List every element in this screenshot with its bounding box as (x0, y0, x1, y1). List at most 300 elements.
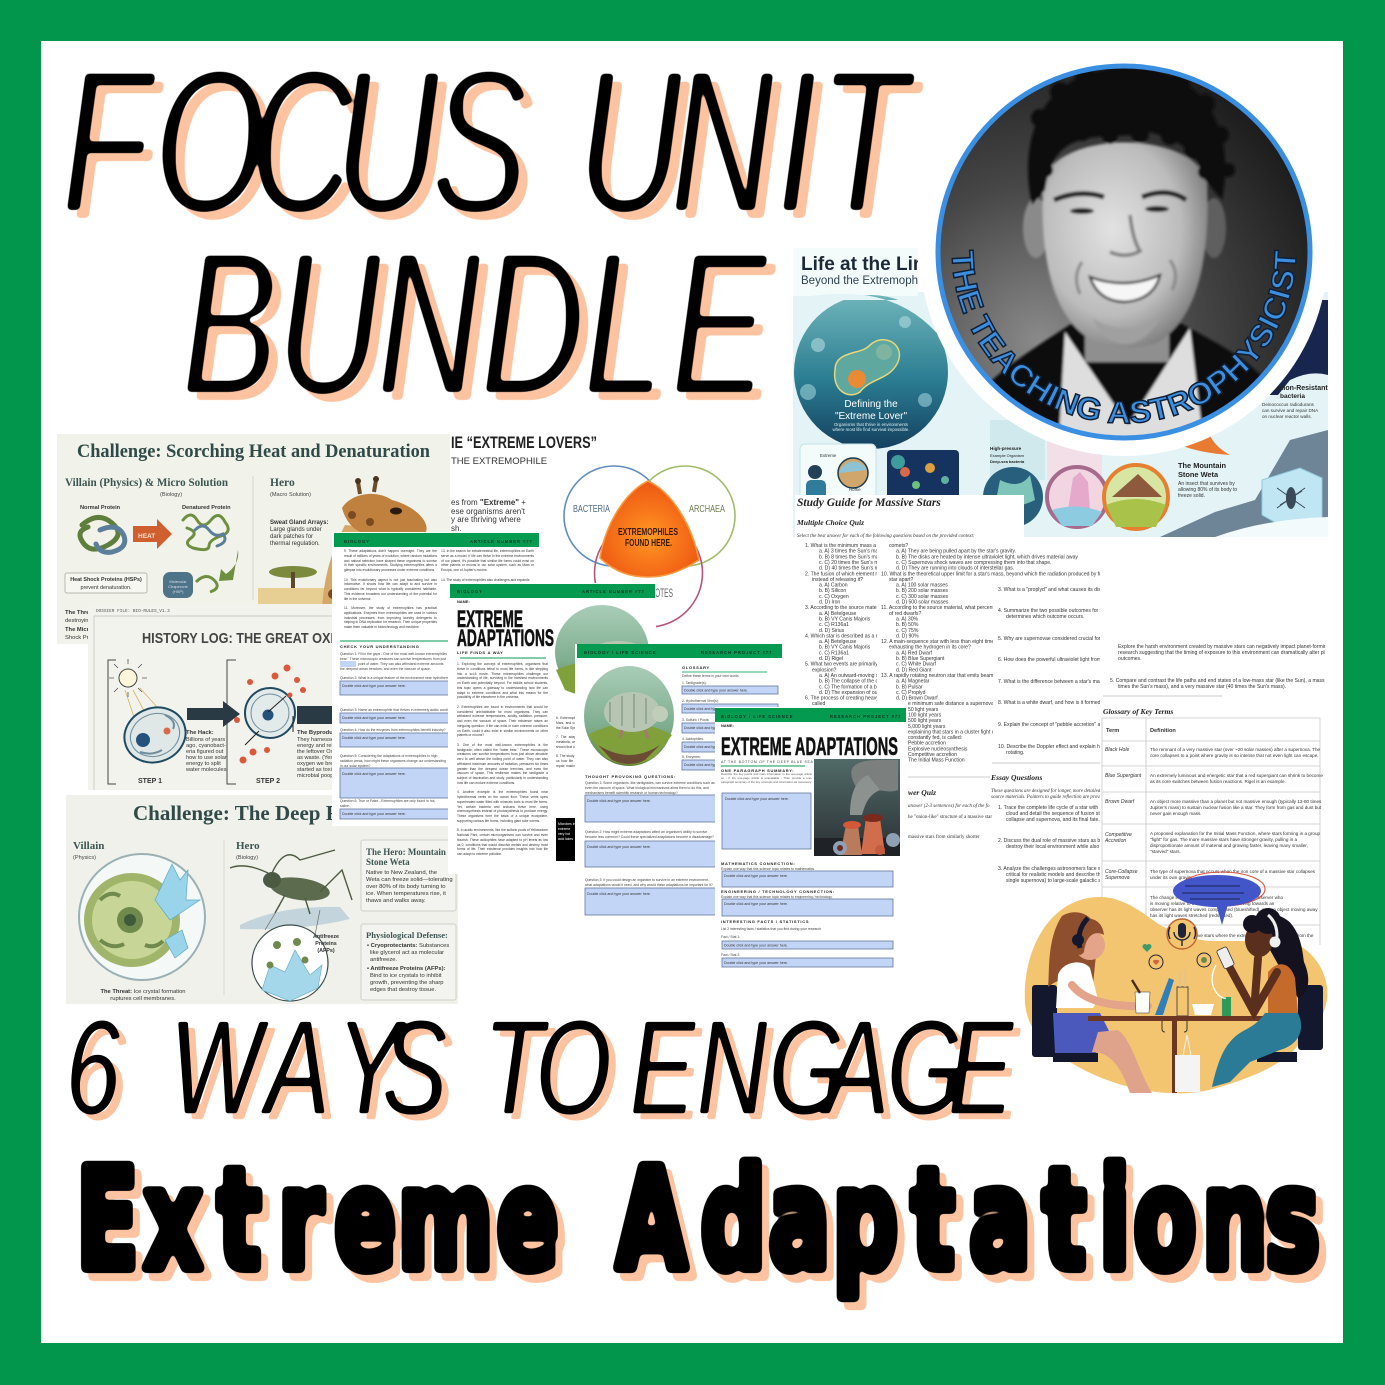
panel: Challenge The Deep Freeze slide (66, 795, 458, 1004)
panel: Study Guide for Massive Stars pages: rotating. (1006, 750, 1024, 756)
panel: Study Guide for Massive Stars pages: c. C) 300 solar masses (896, 594, 949, 600)
panel: Challenge The Deep Freeze slide: The Hero: Mountain (366, 847, 446, 857)
panel: Study Guide for Massive Stars pages: 5. What two events are primarily res (805, 662, 887, 668)
panel: Glossary of Key Terms page: times the Sun's mass), and a very massive star (40 times the Sun's mass). (1118, 684, 1286, 690)
title: BUNDLE: BUNDLE (191, 219, 778, 446)
panel: Challenge The Deep Freeze slide: Proteins (315, 941, 337, 947)
panel: Life at the Limit poster: where most life find survival impossible. (832, 427, 910, 432)
document: Research project glossary and questions page: 3. Sulfuric / Pools: (682, 718, 709, 722)
panel: Study Guide for Massive Stars pages: of red dwarfs? (889, 611, 921, 617)
panel: History Log slide: as waste. (Yes, (297, 755, 335, 761)
panel: Life at the Limit poster: freeze solid. (1178, 493, 1205, 499)
panel: Study Guide for Massive Stars pages: a. A) 30% (896, 616, 919, 622)
panel: Life at the Limit poster: Defining the (844, 399, 898, 410)
document: At the bottom of the deep blue sea page: BIOLOGY / LIFE SCIENCE (721, 714, 793, 719)
document: Research project glossary and questions page: Question 1: Some organisms, like tardigrades, can survive extreme conditions such as (585, 781, 715, 785)
panel: Challenge The Deep Freeze slide: antifreeze. (370, 957, 397, 963)
panel: Study Guide for Massive Stars pages: b. B) Blue Supergiant (896, 656, 945, 662)
panel: Challenge The Deep Freeze slide: growth, preventing the sharp (370, 980, 443, 986)
panel: Study Guide for Massive Stars pages: single supernova) to large-scale galactic structu (1006, 878, 1114, 884)
document: Biology article 77 questions page: in our solar system? (340, 764, 370, 768)
document: At the bottom of the deep blue sea page: MATHEMATICS CONNECTION: (721, 861, 795, 866)
document: Extreme Adaptations article page: Microbes in (558, 822, 575, 826)
panel: Study Guide for Massive Stars pages: 7. What is the difference between a star's mass and (998, 679, 1115, 685)
panel: Challenge The Deep Freeze slide: • Cryoprotectants: Substances (367, 943, 449, 949)
panel: History Log slide: STEP 2 (256, 778, 280, 785)
panel: Study Guide for Massive Stars pages: 3. According to the source material, (805, 605, 885, 611)
title: BUNDLE: BUNDLE (182, 211, 769, 438)
panel: Study Guide for Massive Stars pages: d. D) 90% (896, 633, 919, 639)
panel: Life at the Limit poster: Radiation-Resistant (1262, 385, 1328, 392)
panel: Extreme Lovers venn infographic: BACTERIA (573, 504, 610, 515)
document: At the bottom of the deep blue sea page: Fact / Stat 2: (721, 953, 740, 957)
panel: Study Guide for Massive Stars pages: d. D) Brown Dwarf (896, 696, 938, 702)
panel: Study Guide for Massive Stars pages: d. D) They are running into clouds of interstellar gas. (896, 566, 1014, 572)
panel: Glossary of Key Terms page: as its core switches between fusion reactions. Rigel is an example. (1150, 779, 1286, 784)
document: At the bottom of the deep blue sea page: Explain one way that this science topic relates to mathematics. (721, 867, 815, 871)
panel: Study Guide for Massive Stars pages: c. C) The formation of a blac (819, 684, 884, 690)
panel: Challenge Scorching Heat and Denaturation slide: thermal regulation. (270, 541, 320, 547)
panel: Study Guide for Massive Stars pages: a. A) Carbon (819, 583, 848, 589)
panel: Life at the Limit poster: bacteria (1280, 393, 1305, 400)
panel: Glossary of Key Terms page: Definition (1150, 728, 1176, 734)
panel: Challenge Scorching Heat and Denaturation slide: Hero (270, 477, 295, 489)
illustration: two people listening to a podcast (1025, 872, 1327, 1093)
panel: Study Guide for Massive Stars pages: massive stars from similarly shorter (908, 835, 980, 840)
panel: Challenge Scorching Heat and Denaturation slide: dark patches for (270, 534, 313, 540)
panel: Study Guide for Massive Stars pages: destroy their local environment while also enabli (1006, 844, 1114, 850)
panel: Study Guide for Massive Stars pages: c. C) Oxygen (819, 594, 849, 600)
panel: Study Guide for Massive Stars pages: star apart? (889, 577, 914, 583)
panel: Study Guide for Massive Stars pages: 4. Which star is described as a red (805, 633, 883, 639)
panel: Glossary of Key Terms page (1102, 644, 1385, 945)
document: Research project glossary and questions page: become less common? Could these specialized adaptations become a disadvantage? (585, 835, 714, 839)
panel: Glossary of Key Terms page: outcomes. (1118, 656, 1142, 662)
panel: Study Guide for Massive Stars pages: instead of releasing it? (812, 577, 863, 583)
document: Research project glossary and questions page: 1. Tardigrade(s): (682, 681, 707, 685)
panel: Study Guide for Massive Stars pages: These questions are designed for longer, more detailed (991, 789, 1101, 794)
document: Research project glossary and questions page: BIOLOGY / LIFE SCIENCE (584, 650, 656, 655)
panel: Life at the Limit poster: Life at the Limit (801, 254, 942, 275)
panel: Glossary of Key Terms page: Accretion (1104, 838, 1126, 844)
panel: Study Guide for Massive Stars pages: a. A) Red Dwarf (896, 650, 933, 656)
panel: Life at the Limit poster: An insect that survives by (1178, 481, 1235, 487)
panel: Extreme Lovers venn infographic: sh. (451, 524, 462, 533)
heading: 6 WAYS TO ENGAGE: 6 WAYS TO ENGAGE (66, 992, 1014, 1143)
panel: Challenge The Deep Freeze slide: edges that destroy tissue. (370, 987, 436, 993)
panel: Study Guide for Massive Stars pages: 5. Why are supernovae considered crucial for the existence of planets like Earth and life as we know it? (998, 636, 1231, 642)
document: Extreme Adaptations article page: 7. The adaptations seen in these organisms are physical, metabolic, and evolutionary. These studies high over time have shown that organisms. (556, 735, 649, 748)
panel: Study Guide for Massive Stars pages: d. D) Rigel (819, 656, 843, 662)
heading: 6 WAYS TO ENGAGE: 6 WAYS TO ENGAGE (73, 998, 1021, 1149)
panel: Challenge The Deep Freeze slide: over 80% of its body turning to (366, 884, 446, 890)
document: At the bottom of the deep blue sea page: List 2 interesting facts / statistics that you find during your research (721, 927, 821, 931)
panel: Life at the Limit poster: allowing 80% of its body to (1178, 487, 1237, 493)
panel: Challenge Scorching Heat and Denaturation slide: Denatured Protein (182, 505, 231, 511)
document: Biology article 77 questions page: point of water. They can also withstand extreme amounts (358, 662, 444, 666)
icon: podcast microphone (1167, 919, 1197, 949)
panel: Extreme Lovers venn infographic (451, 433, 736, 628)
panel: History Log slide: oxygen we bre (297, 761, 333, 767)
document: Biology article 77 questions page: Question 5: Considering the adaptations of extremophiles to high (340, 754, 438, 758)
panel: History Log slide: Billions of years (186, 737, 225, 743)
panel: Glossary of Key Terms page: Supernova (1105, 875, 1130, 881)
panel: Study Guide for Massive Stars pages: cloud and detail the sequence of fusion stages it (1006, 811, 1115, 817)
document: At the bottom of the deep blue sea page: RESEARCH PROJECT #77 (830, 714, 901, 719)
document: At the bottom of the deep blue sea page: ENGINEERING / TECHNOLOGY CONNECTION: (721, 889, 835, 894)
document: Extreme Adaptations article page: 6. Extremophiles are also important in astrobiology, similar to Mars, and could be hosts for life, leading scientists to search the Solar System. (556, 716, 649, 730)
panel: Study Guide for Massive Stars pages: comets? (889, 543, 908, 549)
document: Extreme Adaptations article page: LIFE FINDS A WAY (457, 650, 504, 655)
panel: Challenge The Deep Freeze slide: Weta can freeze solid—tolerating (366, 877, 453, 883)
document: Biology article 77 questions page: Question 1: Fill in the gaps - One of the most well-known extremophiles is the (340, 652, 456, 656)
panel: Life at the Limit poster: High-pressure (990, 446, 1022, 451)
document: Biology article 77 questions page: saline. (340, 804, 350, 808)
panel: Study Guide for Massive Stars pages: determines which outcome occurs. (1006, 614, 1084, 620)
document: Extreme Adaptations article page: 8. The study of extreme life reveals special enzymes that show us how life persists under pressure and reveal unique DNA repair, making these studies crucial. (556, 754, 649, 768)
panel: Glossary of Key Terms page: An object more massive than a planet but not massive enough (typically 13-80 times (1150, 799, 1322, 804)
document: Extreme Adaptations article page: NAME: (457, 599, 470, 604)
panel: Glossary of Key Terms page: disproportionate amount of material and growing faster, leaving many smaller, (1150, 843, 1308, 848)
panel: History Log slide: The Byproduct (297, 730, 338, 736)
panel: Study Guide for Massive Stars pages: collapse and supernova, and its final fate. (1006, 817, 1100, 823)
panel: Challenge Scorching Heat and Denaturation slide: (Macro Solution) (270, 492, 311, 498)
panel: Study Guide for Massive Stars pages: b. B) Pulsar (896, 684, 923, 690)
document: Extreme Adaptations article page (448, 583, 656, 874)
panel: Extreme Lovers venn infographic: IE “EXTREME LOVERS” (451, 433, 597, 452)
document: At the bottom of the deep blue sea page: ONE PARAGRAPH SUMMARY: (721, 768, 794, 773)
panel: Challenge The Deep Freeze slide: Challenge: The Deep Freeze (133, 801, 385, 825)
panel: Glossary of Key Terms page: core collapses to a point where gravity is so intense that not even light can escape. (1150, 753, 1319, 758)
panel: Life at the Limit poster: Stone Weta (1178, 470, 1219, 479)
panel: Glossary of Key Terms page: A proposed explanation for the Initial Mass Function, where stars forming in a group (1150, 831, 1321, 836)
document: Research project glossary and questions page: Question 3: If you could design an organism to survive in an extreme environment, (585, 878, 709, 882)
document: At the bottom of the deep blue sea page: Double click and type your answer here. (724, 961, 788, 965)
panel: Extreme Lovers venn infographic: THE EXTREMOPHILE (451, 456, 547, 467)
panel: Glossary of Key Terms page: Glossary of Key Terms (1103, 707, 1173, 716)
panel: Study Guide for Massive Stars pages: source materials. Pointers to guide reflection are provid (991, 795, 1104, 800)
panel: Study Guide for Massive Stars pages: b. B) 50% (896, 622, 919, 628)
panel: Challenge Scorching Heat and Denaturation slide (57, 434, 450, 644)
panel: Challenge Scorching Heat and Denaturation slide: (Biology) (160, 492, 182, 498)
panel: Extreme Lovers venn infographic: ARCHAEA (689, 504, 725, 515)
panel: Study Guide for Massive Stars pages: 1. Trace the complete life cycle of a star with 25 tim (998, 805, 1114, 811)
panel: Study Guide for Massive Stars pages: he "onion-like" structure of a massive star (908, 815, 992, 820)
panel: Study Guide for Massive Stars pages: b. B) The disks are heated by intense ultraviolet light, which drives material away (896, 554, 1078, 560)
panel: Study Guide for Massive Stars pages: explaining that stars in a cluster fight ove (908, 729, 1000, 735)
panel: Study Guide for Massive Stars pages: c. C) 20 times the Sun's mass (819, 560, 887, 566)
panel: Study Guide for Massive Stars pages (795, 495, 1246, 884)
document: Research project glossary and questions page: what adaptations would it need, and why would these adaptations be important for it? (585, 883, 713, 887)
document: Research project glossary and questions page: GLOSSARY (682, 665, 710, 670)
panel: Study Guide for Massive Stars pages: Competitive accretion (908, 752, 957, 758)
panel: Study Guide for Massive Stars pages: 2. Discuss the dual role of massive stars as both d (998, 838, 1112, 844)
panel: Study Guide for Massive Stars pages: 6. How does the powerful ultraviolet light from massive (998, 657, 1121, 663)
document: Biology article 77 questions page: Question 3: Name an extremophile that thrives in extremely acidic conditions. (340, 708, 456, 712)
panel: Challenge The Deep Freeze slide: Hero (236, 840, 260, 852)
document: Extreme Adaptations article page: 2. Extremophiles are found in environments that would be considered uninhabitable for most organisms. They can withstand extreme temperatures, acidity, radiation, pressure, and even the vacuum of space. Their existence raises an intriguing question: if life can exist in such extreme conditions on Earth, could it also exist in similar environments on other planets or moons? (457, 705, 548, 737)
document: Research project glossary and questions page: Define these terms in your own words (682, 674, 739, 678)
document: Extreme Adaptations article page: ADAPTATIONS (457, 625, 554, 652)
document: Research project glossary and questions page: THOUGHT PROVOKING QUESTIONS: (585, 774, 676, 779)
panel: Challenge Scorching Heat and Denaturation slide: destroying (65, 618, 92, 624)
panel: Study Guide for Massive Stars pages: a. A) 100 solar masses (896, 583, 948, 589)
document: Extreme Adaptations article page: 3. One of the most well-known extremophiles is the tardigrade, often called the "water bear." These microscopic creatures can survive temperatures from just above absolute zero to well above the boiling point of water. They can also withstand maximum amounts of radiation, pressures six times greater than the deepest ocean trenches, and even the vacuum of space. This resilience makes the tardigrade a subject of fascination and study, particularly in understanding how life can endure extreme conditions. (457, 743, 548, 785)
panel: Study Guide for Massive Stars pages: a. A) 3 times the Sun's mass (819, 549, 884, 555)
document: Extreme Adaptations article page: EXTREME (457, 606, 523, 633)
panel: Extreme Lovers venn infographic: y are thriving where (451, 515, 521, 524)
panel: Life at the Limit poster: Extreme (820, 453, 837, 458)
panel: Study Guide for Massive Stars pages: Select the best answer for each of the following questions based on the provided context: (797, 534, 975, 539)
panel: History Log slide: energy to split (186, 761, 221, 767)
panel: Challenge The Deep Freeze slide: The Threat: Ice crystal formation (100, 989, 186, 995)
document: Biology article 77 questions page: 9. These adaptations didn't happen overnight. They are the result of millions of years of evolution, where random mutations and natural selection have shaped these organisms to survive in their specific environments. Studying extremophiles offers a glimpse into evolutionary processes under extreme conditions. (344, 549, 437, 572)
panel: Study Guide for Massive Stars pages: Study Guide for Massive Stars (797, 497, 941, 509)
panel: Glossary of Key Terms page: Core-Collapse (1105, 869, 1138, 875)
panel: Glossary of Key Terms page: Jupiter's mass) to sustain nuclear fusion like a star. They form from gas and dust but (1150, 805, 1322, 810)
panel: Study Guide for Massive Stars pages: b. B) The collapse of the cor (819, 679, 883, 685)
document: Biology article 77 questions page: Question 2: What is a unique feature of the environment near hydrothermal vents? (340, 676, 464, 680)
panel: Challenge The Deep Freeze slide: Stone Weta (366, 857, 410, 867)
document: Biology article 77 questions page: radiation areas, how might these organisms change our understanding (340, 759, 446, 763)
panel: Study Guide for Massive Stars pages: c. C) R136a1 (819, 650, 849, 656)
panel: Challenge Scorching Heat and Denaturation slide: Molecular (169, 579, 187, 584)
panel: Challenge The Deep Freeze slide: (Physics) (73, 855, 96, 861)
document: Extreme Adaptations article page: acid lakes (558, 837, 573, 841)
document: Biology article 77 questions page: ARTICLE NUMBER #77 (470, 539, 533, 544)
icon: speech bubble (1173, 872, 1265, 925)
panel: Study Guide for Massive Stars pages: 2. The fusion of which element mark (805, 571, 887, 577)
document: Research project glossary and questions page: Double click and type your answer here. (684, 763, 748, 767)
panel: Study Guide for Massive Stars pages: Multiple Choice Quiz (796, 518, 864, 527)
panel: Glossary of Key Terms page: never gain enough mass. (1150, 811, 1202, 816)
panel: Glossary of Key Terms page: An extremely luminous and energetic star that a red supergiant can shrink to become (1150, 773, 1323, 778)
heading: Extreme Adaptations: Extreme Adaptations (83, 1146, 1327, 1309)
panel: Study Guide for Massive Stars pages: d. D) 500 solar masses (896, 600, 949, 606)
panel: Glossary of Key Terms page: The type of supernova that occurs when the iron core of a massive star collapses (1150, 869, 1316, 874)
title: FOCUS UNIT: FOCUS UNIT (71, 37, 924, 264)
panel: Study Guide for Massive Stars pages: 3. What is a "proplyd" and what causes its distinctive shape? (998, 587, 1135, 593)
panel: Life at the Limit poster: can survive and repair DNA (1262, 408, 1319, 413)
panel: Life at the Limit poster: Deep-sea bacteria (990, 459, 1025, 464)
panel: Study Guide for Massive Stars pages: d. D) Red Giant (896, 667, 932, 673)
panel: History Log slide: started as toxic (297, 767, 335, 773)
photo: The Teaching Astrophysicist badge: THE TEACHING ASTROPHYSICIST (951, 249, 1296, 424)
panel: Study Guide for Massive Stars pages: b. B) VY Canis Majoris (819, 616, 871, 622)
document: Extreme Adaptations article page: extreme (558, 827, 570, 831)
panel: Study Guide for Massive Stars pages: 10. Describe the Doppler effect and explain how col (998, 744, 1114, 750)
panel: Study Guide for Massive Stars pages: 10. What is the theoretical upper limit for a star's mass, beyond which the radiation produced by fusion blows the (881, 571, 1134, 577)
panel: Study Guide for Massive Stars pages: b. B) VY Canis Majoris (819, 645, 871, 651)
panel: Challenge Scorching Heat and Denaturation slide: The Microbial (65, 627, 103, 633)
document: Extreme Adaptations article page: ARTICLE NUMBER #77 (582, 589, 645, 594)
panel: Study Guide for Massive Stars pages: The Initial Mass Function (908, 758, 965, 764)
panel: History Log slide: STEP 1 (138, 778, 162, 785)
panel: Challenge The Deep Freeze slide: (Biology) (236, 855, 258, 861)
document: Biology article 77 questions page: 14. The study of extremophiles also challenges and expands (441, 578, 529, 582)
document: At the bottom of the deep blue sea page: Fact / Stat 1: (721, 935, 740, 939)
panel: Glossary of Key Terms page: Competitive (1105, 832, 1132, 838)
document: Research project glossary and questions page: 5. Enzymes: (682, 755, 701, 759)
document: Biology article 77 questions page: 13. In the search for extraterrestrial life, extremophiles on Earth serve as a model. If life can thrive in the extreme environments of our planet, it's possible that similar life forms could exist on other planets or moons in our solar system, such as Mars or Europa, one of Jupiter's moons. (441, 549, 534, 572)
panel: Challenge The Deep Freeze slide: • Antifreeze Proteins (AFPs): (367, 966, 446, 972)
document: Research project glossary and questions page: RESEARCH PROJECT #77 (701, 650, 772, 655)
panel: Study Guide for Massive Stars pages: Pebble accretion (908, 741, 946, 747)
document: Research project glossary and questions page: mechanisms benefit scientific research or human technology? (585, 791, 678, 795)
panel: Study Guide for Massive Stars pages: 50 light years (908, 707, 939, 713)
panel: History Log slide (88, 604, 338, 790)
panel: Study Guide for Massive Stars pages: 8. What is a white dwarf, and how is it formed? (998, 700, 1103, 706)
panel: Life at the Limit poster: on nuclear reactor walls. (1262, 414, 1312, 419)
document: Biology article 77 questions page (332, 532, 539, 826)
panel: Extreme Lovers venn infographic: EXTREMOPHILES (618, 527, 678, 538)
panel: Study Guide for Massive Stars pages: c. C) Proplyd (896, 690, 926, 696)
panel: Study Guide for Massive Stars pages: exhausting the hydrogen in its core? (889, 645, 971, 651)
panel: Extreme Lovers venn infographic: ese organisms aren't (451, 507, 526, 516)
panel: Challenge Scorching Heat and Denaturation slide: HEAT (138, 533, 155, 540)
panel: Glossary of Key Terms page: observer has its light waves compressed (blueshifted), and an object moving away (1150, 907, 1318, 912)
panel: Challenge Scorching Heat and Denaturation slide: prevent denaturation. (81, 585, 131, 591)
panel: Challenge Scorching Heat and Denaturation slide: Sweat Gland Arrays: (270, 520, 328, 526)
panel: Life at the Limit poster: Example Organism (990, 453, 1025, 458)
panel: Challenge Scorching Heat and Denaturation slide: Challenge: Scorching Heat and Denaturation (77, 441, 430, 462)
document: Research project glossary and questions page: Double click and type your answer here. (684, 688, 748, 692)
panel: Glossary of Key Terms page: The remnant of a very massive star (over ~20 solar masses) after a supernova. The (1150, 747, 1321, 752)
panel: Study Guide for Massive Stars pages: d. D) Sirius (819, 628, 845, 634)
panel: Study Guide for Massive Stars pages: wer Quiz (908, 788, 936, 797)
panel: Challenge Scorching Heat and Denaturation slide: Normal Protein (80, 505, 121, 511)
panel: Study Guide for Massive Stars pages: a. A) Magnetar (896, 679, 930, 685)
document: At the bottom of the deep blue sea page: Double click and type your answer here. (724, 944, 788, 948)
document: At the bottom of the deep blue sea page: INTERESTING FACTS / STATISTICS (721, 919, 809, 924)
panel: Study Guide for Massive Stars pages: a. A) They are being pulled apart by the star's gravity. (896, 549, 1016, 555)
document: Biology article 77 questions page: bear." These microscopic creatures can survive temperatures from just (340, 657, 446, 661)
panel: Glossary of Key Terms page: The change in frequency of a wave in relation to an observer who (1150, 895, 1283, 900)
document: Research project glossary and questions page: Double click and type your answer here. (587, 799, 651, 803)
panel: Challenge Scorching Heat and Denaturation slide: Chaperone (168, 584, 189, 589)
panel: Challenge The Deep Freeze slide: thaws and walks away. (366, 898, 426, 904)
panel: Challenge The Deep Freeze slide: ice. When temperatures rise, it (366, 891, 446, 897)
panel: Life at the Limit poster: "Extreme Lover" (835, 411, 908, 422)
document: Research project glossary and questions page: Question 2: How might extreme adaptations affect an organism's ability to survive (585, 830, 707, 834)
document: Extreme Adaptations article page: BIOLOGY (457, 589, 483, 594)
document: Biology article 77 questions page: Double click and type your answer here. (342, 684, 406, 688)
panel: Glossary of Key Terms page: Blue Supergiant (1105, 773, 1142, 779)
document: Research project glossary and questions page: Double click and type your answer here. (587, 892, 651, 896)
document: Research project glossary and questions page: Double click and type your answer here. (587, 845, 651, 849)
panel: Challenge The Deep Freeze slide: Native to New Zealand, the (366, 870, 438, 876)
panel: History Log slide: energy and rele (297, 743, 336, 749)
panel: Study Guide for Massive Stars pages: b. B) 200 solar masses (896, 588, 949, 594)
panel: Glossary of Key Terms page: research suggesting that the timing of exposure to this environment can dramatically alter planetary (1118, 650, 1342, 656)
panel: Study Guide for Massive Stars pages: c. C) White Dwarf (896, 662, 936, 668)
panel: Study Guide for Massive Stars pages: called (812, 701, 825, 707)
panel: Glossary of Key Terms page: Brown Dwarf (1105, 799, 1135, 805)
document: Biology article 77 questions page: 10. This evolutionary aspect is not just fascinating but also informative. It shows how life can adapt to and survive in conditions far beyond what is typically considered habitable. This evidence broadens our understanding of the potential for life in the universe. (344, 578, 437, 600)
document: Research project glossary and questions page (575, 644, 782, 916)
panel: Glossary of Key Terms page: under its own gravity. (1150, 875, 1193, 880)
panel: Study Guide for Massive Stars pages: d. D) Iron (819, 600, 840, 606)
panel: Study Guide for Massive Stars pages: 3. Analyze the challenges astronomers face when (998, 866, 1110, 872)
white mask above poster (918, 240, 1333, 292)
document: Biology article 77 questions page: CHECK YOUR UNDERSTANDING (340, 644, 420, 649)
panel: Challenge The Deep Freeze slide: (AFPs) (317, 948, 335, 954)
panel: Study Guide for Massive Stars pages: 13. A rapidly rotating neutron star that emits beams of X (881, 673, 1007, 679)
document: Biology article 77 questions page: Question 4: How do the enzymes from extremophiles benefit industry? (340, 728, 446, 732)
document: At the bottom of the deep blue sea page: Double click and type your answer here. (724, 902, 788, 906)
panel: Study Guide for Massive Stars pages: 4. Summarize the two possible outcomes for the core of a massive star after a supernova explosion, and what (998, 608, 1246, 614)
document: Biology article 77 questions page: Double click and type your answer here. (342, 736, 406, 740)
title: FOCUS UNIT: FOCUS UNIT (62, 29, 915, 256)
panel: Challenge Scorching Heat and Denaturation slide: The Three-fold (65, 610, 106, 616)
panel: Extreme Lovers venn infographic: OTES (655, 586, 673, 600)
panel: History Log slide: microbial poop) (297, 773, 335, 779)
document: At the bottom of the deep blue sea page (715, 707, 906, 968)
panel: Challenge Scorching Heat and Denaturation slide: Villain (Physics) & Micro Solution (65, 477, 229, 489)
panel: Study Guide for Massive Stars pages: 1. What is the minimum mass a star (805, 543, 886, 549)
document: Research project glossary and questions page: Double click and type your answer here. (684, 745, 748, 749)
panel: Study Guide for Massive Stars pages: d. D) The expansion of outer (819, 690, 884, 696)
panel: Study Guide for Massive Stars pages: 500 light years (908, 718, 942, 724)
panel: Study Guide for Massive Stars pages: c. C) Supernova shock waves are compressing them into that shape. (896, 560, 1051, 566)
panel: Glossary of Key Terms page: "fight" for gas. The more massive stars have stronger gravity, pulling in a (1150, 837, 1298, 842)
panel: History Log slide: DOSSIER FILE: BIO-RULES_V1.3 (96, 609, 170, 614)
panel: History Log slide: eria figured out (186, 749, 224, 755)
panel: Study Guide for Massive Stars pages: 6. The process of creating heavy ele (805, 696, 887, 702)
photo: The Teaching Astrophysicist badge (924, 64, 1324, 456)
panel: Challenge The Deep Freeze slide: Physiological Defense: (366, 930, 448, 940)
document: At the bottom of the deep blue sea page: NAME: (721, 723, 734, 728)
panel: History Log slide: They harnessed (297, 737, 337, 743)
document: Research project glossary and questions page: 2. Hydrothermal Vent(s): (682, 699, 719, 703)
document: At the bottom of the deep blue sea page: Explain one way that this science topic relates to engineering / technology. (721, 895, 833, 899)
panel: Challenge The Deep Freeze slide: Bind to ice crystals to inhibit (370, 973, 442, 979)
panel: Study Guide for Massive Stars pages: critical for realistic models and describe the "uns (1006, 872, 1115, 878)
panel: Study Guide for Massive Stars pages: 11. According to the source material, what percentage of (881, 605, 1009, 611)
panel: Life at the Limit poster (793, 248, 1328, 537)
document: Biology article 77 questions page: BIOLOGY (344, 539, 370, 544)
document: Research project glossary and questions page: Double click and type your answer here. (684, 726, 748, 730)
panel: Glossary of Key Terms page: The zone around massive stars where the extreme conditions drive gas from the (1150, 933, 1314, 938)
panel: Challenge Scorching Heat and Denaturation slide: Heat Shock Proteins (HSPs) (70, 577, 142, 583)
document: Extreme Adaptations article page: 4. Another example is the extremophiles found near hydrothermal vents on the ocean floor. These vents spew superheated water filled with minerals toxic to most life forms. Yet, certain bacteria and archaea thrive here, using chemosynthesis instead of photosynthesis to produce energy. These organisms form the basis of a unique ecosystem, supporting various life forms, including giant tube worms. (457, 790, 548, 823)
panel: Study Guide for Massive Stars pages: Essay Questions (990, 773, 1042, 782)
panel: Glossary of Key Terms page: Black Hole (1105, 747, 1130, 753)
panel: Study Guide for Massive Stars pages: 9. Explain the concept of "pebble accretion" as a m (998, 722, 1113, 728)
document: At the bottom of the deep blue sea page: Double click and type your answer here. (724, 874, 788, 878)
panel: History Log slide: The Hack: (186, 730, 214, 736)
panel: Study Guide for Massive Stars pages: 5,000 light years (908, 724, 946, 730)
panel: Challenge Scorching Heat and Denaturation slide: Large glands under (270, 527, 322, 533)
panel: Study Guide for Massive Stars pages: d. D) 40 times the Sun's mass (819, 566, 887, 572)
document: At the bottom of the deep blue sea page: AT THE BOTTOM OF THE DEEP BLUE SEA (721, 760, 814, 764)
panel: Glossary of Key Terms page: "starved" stars. (1150, 849, 1181, 854)
document: Extreme Adaptations article page: 1. Exploring the concept of extremophiles, organisms that thrive in conditions lethal to most life forms, is like stepping into a sci-fi movie. These extremophiles challenge our understanding of life, surviving in the harshest environments on Earth and potentially beyond. For middle school students, this topic opens a gateway to understanding how life can adapt to extreme conditions and what this means for the possibility of life elsewhere in the universe. (457, 662, 548, 699)
panel: History Log slide: ago, cyanobact- (186, 743, 226, 749)
panel: Glossary of Key Terms page: is moving relative to the source: an object moving towards an (1150, 901, 1275, 906)
panel: Study Guide for Massive Stars pages: 100 light years (908, 712, 942, 718)
panel: History Log slide: the leftover Oxy (297, 749, 336, 755)
panel: History Log slide: water molecules. (185, 767, 228, 773)
panel: Challenge The Deep Freeze slide: ruptures cell membranes. (110, 996, 176, 1002)
panel: History Log slide: how to use solar (186, 755, 227, 761)
document: Research project glossary and questions page: 4. Acidophiles: (682, 737, 704, 741)
panel: Life at the Limit poster: Home (849, 487, 861, 492)
panel: Study Guide for Massive Stars pages: Explosive nucleosynthesis (908, 746, 968, 752)
panel: Study Guide for Massive Stars pages: a. A) Betelgeuse (819, 639, 857, 645)
panel: Life at the Limit poster: Beyond the Extremophile (801, 275, 930, 287)
panel: Life at the Limit poster: The Mountain (1178, 461, 1227, 470)
